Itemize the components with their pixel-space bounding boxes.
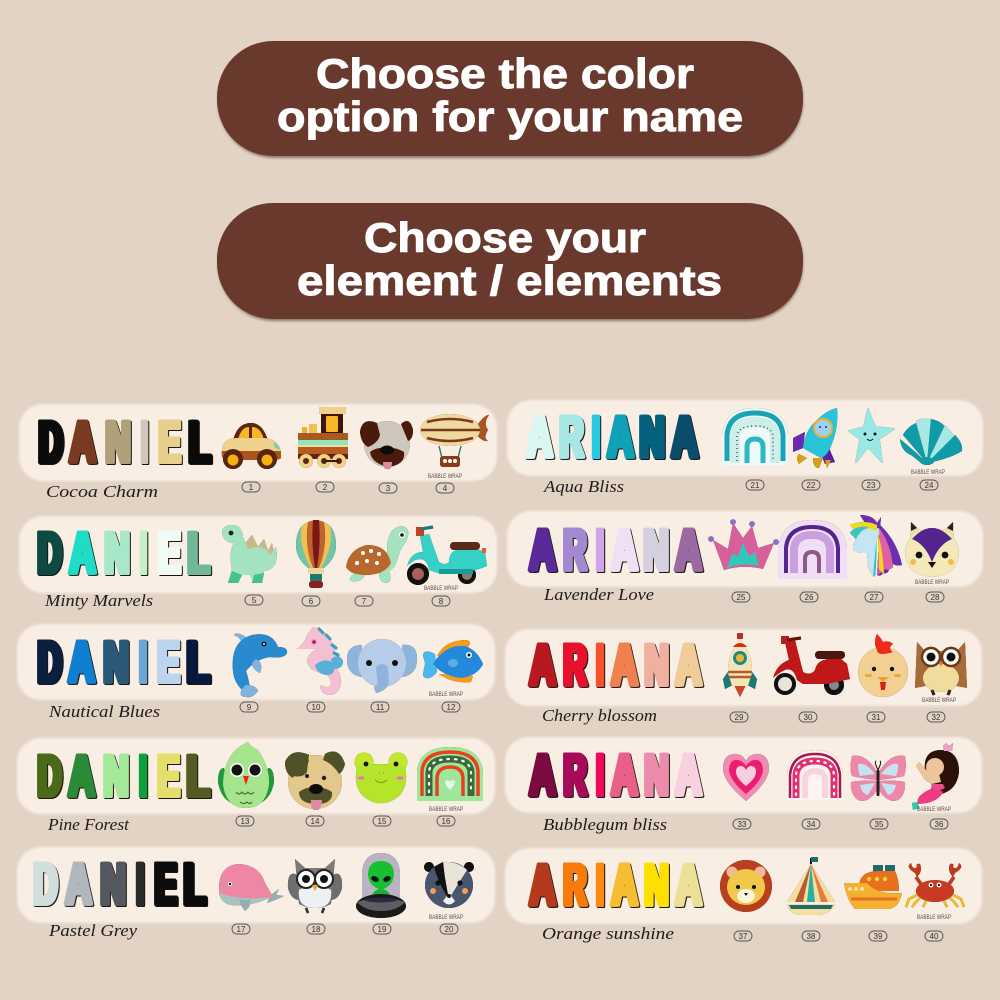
brand mark 8: BABBLE WRAP [424,586,458,592]
label: Lavender Love: Lavender Love [543,585,654,604]
name letters: Minty Marvels: N [105,521,130,586]
number badges row 4: 16 [442,817,451,826]
name letters: Nautical Blues: E [158,630,180,695]
label: Aqua Bliss: Aqua Bliss [543,477,624,496]
icon 32: brown owl [915,642,967,695]
name letters: Orange sunshine: A [530,853,556,918]
number badges row 3: 10 [312,703,321,712]
label: Cocoa Charm: Cocoa Charm [46,482,158,501]
number badges row 4: 14 [311,817,320,826]
number badges row 5: 17 [237,925,246,934]
number badges row 21-24: 22 [807,481,816,490]
panel: Cocoa Charm [19,404,497,501]
icon 10: seahorse [297,627,343,695]
name letters: Minty Marvels: A [70,521,96,586]
number badges row 25-28: 27 [870,593,879,602]
panel: Bubblegum bliss [505,737,982,834]
icon 31: rooster [858,634,908,697]
icon 12: fish [423,640,483,682]
icon 35: butterfly [850,756,906,801]
heading pill: choose your element: element / elements [297,257,722,304]
brand mark 28: BABBLE WRAP [915,580,949,586]
heading pill: choose the color [217,41,803,158]
name letters: Nautical Blues: L [187,630,210,695]
heading pill: choose the color: Choose the color [316,50,694,97]
number badges row 21-24: 24 [925,481,934,490]
panel: Lavender Love [507,511,983,604]
panel: Minty Marvels [19,516,497,610]
name letters: Aqua Bliss: I [593,405,600,470]
name letters: Cocoa Charm: N [106,410,131,475]
icon 18: grey owl [288,859,342,913]
icon 40: crab [906,863,964,907]
number badges row 29-32: 32 [932,713,941,722]
icon 37: lion [720,860,772,912]
icon 13: green owl [218,742,274,808]
name letters: Pastel Grey: I [137,852,144,917]
number badges row 2 [245,595,450,606]
name letters: Lavender Love [530,518,702,583]
name letters: Aqua Bliss [527,405,698,470]
name letters: Pastel Grey [34,852,206,917]
number badges row 1: 1 [249,483,254,492]
name letters: Cocoa Charm: I [142,410,148,475]
name letters: Cherry blossom: I [597,633,604,698]
number badges row 29-32 [730,712,945,722]
name letters: Orange sunshine: A [676,853,702,918]
name letters: Pastel Grey: E [155,852,177,917]
icon 25: crown [708,519,779,570]
icon 7: turtle [346,526,408,583]
icon 16: green rainbow [417,747,483,801]
heading pill: choose the color: option for your name [277,93,743,140]
name letters: Nautical Blues: A [69,630,95,695]
name letters: Pastel Grey: N [101,852,126,917]
brand mark 12: BABBLE WRAP [429,692,463,698]
icon 4: airship [420,414,489,467]
number badges row 33-36: 35 [875,820,884,829]
icon 15: frog [354,752,408,803]
name letters: Bubblegum bliss: R [564,743,587,808]
name letters: Lavender Love: R [564,518,587,583]
number badges row 2: 7 [362,597,367,606]
label: Minty Marvels: Minty Marvels [44,591,153,610]
name letters: Bubblegum bliss: A [530,743,556,808]
number badges row 29-32: 31 [872,713,881,722]
panel: Pastel Grey [17,847,495,940]
icon 29: retro rocket [723,633,757,697]
name letters: Cherry blossom: R [564,633,587,698]
name letters: Lavender Love: A [676,518,702,583]
number badges row 3: 12 [447,703,456,712]
icon 27: unicorn [850,515,902,577]
number badges row 4 [236,816,455,826]
label: Orange sunshine: Orange sunshine [542,924,675,943]
name letters: Pastel Grey: D [34,852,58,917]
name letters: Minty Marvels: L [188,521,210,586]
name letters: Nautical Blues: N [104,630,129,695]
panel: Pine Forest [17,738,495,834]
number badges row 4: 15 [378,817,387,826]
heading pill: choose your element [217,203,803,321]
number badges row 25-28: 26 [805,593,814,602]
number badges row 25-28: 25 [737,593,746,602]
icon 8: scooter [407,527,487,585]
name letters: Pine Forest [38,744,210,809]
panel: Cherry blossom [505,629,982,725]
name letters: Pastel Grey: L [184,852,206,917]
name letters: Minty Marvels: E [159,521,181,586]
icon 24: seashell [900,418,962,465]
number badges row 25-28 [732,592,944,602]
icon 17: whale [219,864,284,911]
name letters: Lavender Love: N [644,518,669,583]
name letters: Cocoa Charm: E [159,410,181,475]
icon 5: dinosaur [222,525,277,583]
number badges row 5: 19 [378,925,387,934]
name letters: Cocoa Charm: A [70,410,96,475]
icon 3: dog [360,421,413,469]
number badges row 2: 5 [252,596,257,605]
name letters: Aqua Bliss: N [640,405,665,470]
name letters: Lavender Love: I [597,518,604,583]
icon 6: hot air balloon [296,520,336,588]
number badges row 33-36: 36 [935,820,944,829]
name letters: Minty Marvels: D [38,521,62,586]
number badges row 3: 9 [247,703,252,712]
brand mark 20: BABBLE WRAP [429,915,463,921]
icon 38: sailboat [787,857,835,915]
panel: Aqua Bliss [507,400,983,496]
icon 14: tan dog [285,752,345,810]
number badges row 37-40: 38 [807,932,816,941]
icon 39: ship [844,865,902,909]
number badges row 3 [240,702,460,712]
icon 26: purple rainbow [778,520,847,579]
icon 36: mermaid [912,743,959,810]
name letters: Orange sunshine: R [564,853,587,918]
icon 34: pink rainbow [787,750,843,800]
icon 28: fox [905,522,959,577]
name letters: Cherry blossom: A [530,633,556,698]
icon 19: alien ufo [356,853,406,918]
brand mark 32: BABBLE WRAP [922,698,956,704]
name letters: Lavender Love: A [612,518,638,583]
name letters: Cherry blossom [530,633,702,698]
number badges row 33-36: 33 [738,820,747,829]
name letters: Orange sunshine: I [597,853,604,918]
brand mark 4: BABBLE WRAP [428,474,462,480]
name letters: Pastel Grey: A [66,852,92,917]
name letters: Aqua Bliss: A [608,405,634,470]
name letters: Bubblegum bliss: N [645,743,669,808]
name letters: Minty Marvels [38,521,210,586]
number badges row 37-40: 37 [739,932,748,941]
number badges row 21-24: 21 [751,481,760,490]
icon 33: heart [723,754,769,801]
brand mark 16: BABBLE WRAP [429,807,463,813]
name letters: Aqua Bliss: A [672,405,698,470]
panel: Orange sunshine [505,848,982,943]
number badges row 21-24: 23 [867,481,876,490]
number badges row 1: 3 [386,484,391,493]
number badges row 29-32: 30 [804,713,813,722]
number badges row 2: 8 [439,597,444,606]
name letters: Pine Forest: D [38,744,62,809]
icon 11: elephant [347,639,417,693]
name letters: Aqua Bliss: R [560,405,584,470]
number badges row 1: 2 [323,483,328,492]
name letters: Aqua Bliss: A [527,405,553,470]
name letters: Pine Forest: N [104,744,129,809]
name letters: Cocoa Charm: L [189,410,211,475]
name letters: Nautical Blues: I [140,630,147,695]
number badges row 4: 13 [241,817,250,826]
name letters: Pine Forest: E [158,744,180,809]
panel: Nautical Blues [17,624,495,721]
icon 1: car [222,423,281,469]
icon 2: train [298,407,348,468]
name letters: Pine Forest: A [69,744,95,809]
brand mark 24: BABBLE WRAP [911,470,945,476]
name letters: Nautical Blues [38,630,210,695]
name letters: Orange sunshine: N [645,853,669,918]
icon 30: red scooter [773,636,850,695]
number badges row 5 [232,924,458,934]
number badges row 37-40: 39 [874,932,883,941]
number badges row 33-36: 34 [807,820,816,829]
name letters: Minty Marvels: I [141,521,147,586]
icon 20: badger [424,862,474,908]
number badges row 5: 18 [312,925,321,934]
number badges row 21-24 [746,480,938,490]
number badges row 1: 4 [443,484,448,493]
name letters: Cherry blossom: N [645,633,669,698]
name letters: Lavender Love: A [530,518,556,583]
name letters: Bubblegum bliss [530,743,702,808]
heading pill: choose your element: Choose your [364,214,646,261]
number badges row 5: 20 [445,925,454,934]
icon 23: starfish [849,409,894,462]
name letters: Bubblegum bliss: A [612,743,638,808]
icon 22: rocket [793,408,837,468]
label: Nautical Blues: Nautical Blues [48,702,160,721]
number badges row 33-36 [733,819,948,829]
name letters: Orange sunshine: A [612,853,638,918]
label: Cherry blossom: Cherry blossom [542,706,657,725]
name letters: Bubblegum bliss: A [676,743,702,808]
name letters: Cocoa Charm: D [39,410,63,475]
name letters: Cherry blossom: A [612,633,638,698]
number badges row 29-32: 29 [735,713,744,722]
name letters: Cocoa Charm [39,410,211,475]
number badges row 37-40 [734,931,943,941]
number badges row 3: 11 [376,703,385,712]
name letters: Cherry blossom: A [676,633,702,698]
brand mark 36: BABBLE WRAP [917,807,951,813]
name letters: Bubblegum bliss: I [597,743,604,808]
number badges row 37-40: 40 [930,932,939,941]
label: Pastel Grey: Pastel Grey [48,921,137,940]
brand mark 40: BABBLE WRAP [917,915,951,921]
name letters: Pine Forest: I [140,744,147,809]
name letters: Orange sunshine [530,853,702,918]
name letters: Nautical Blues: D [38,630,62,695]
number badges row 25-28: 28 [931,593,940,602]
label: Bubblegum bliss: Bubblegum bliss [543,815,667,834]
number badges row 1 [242,482,454,493]
label: Pine Forest: Pine Forest [47,815,130,834]
icon 21: teal rainbow [722,408,788,465]
number badges row 2: 6 [309,597,314,606]
icon 9: dolphin [233,633,287,697]
name letters: Pine Forest: L [187,744,210,809]
